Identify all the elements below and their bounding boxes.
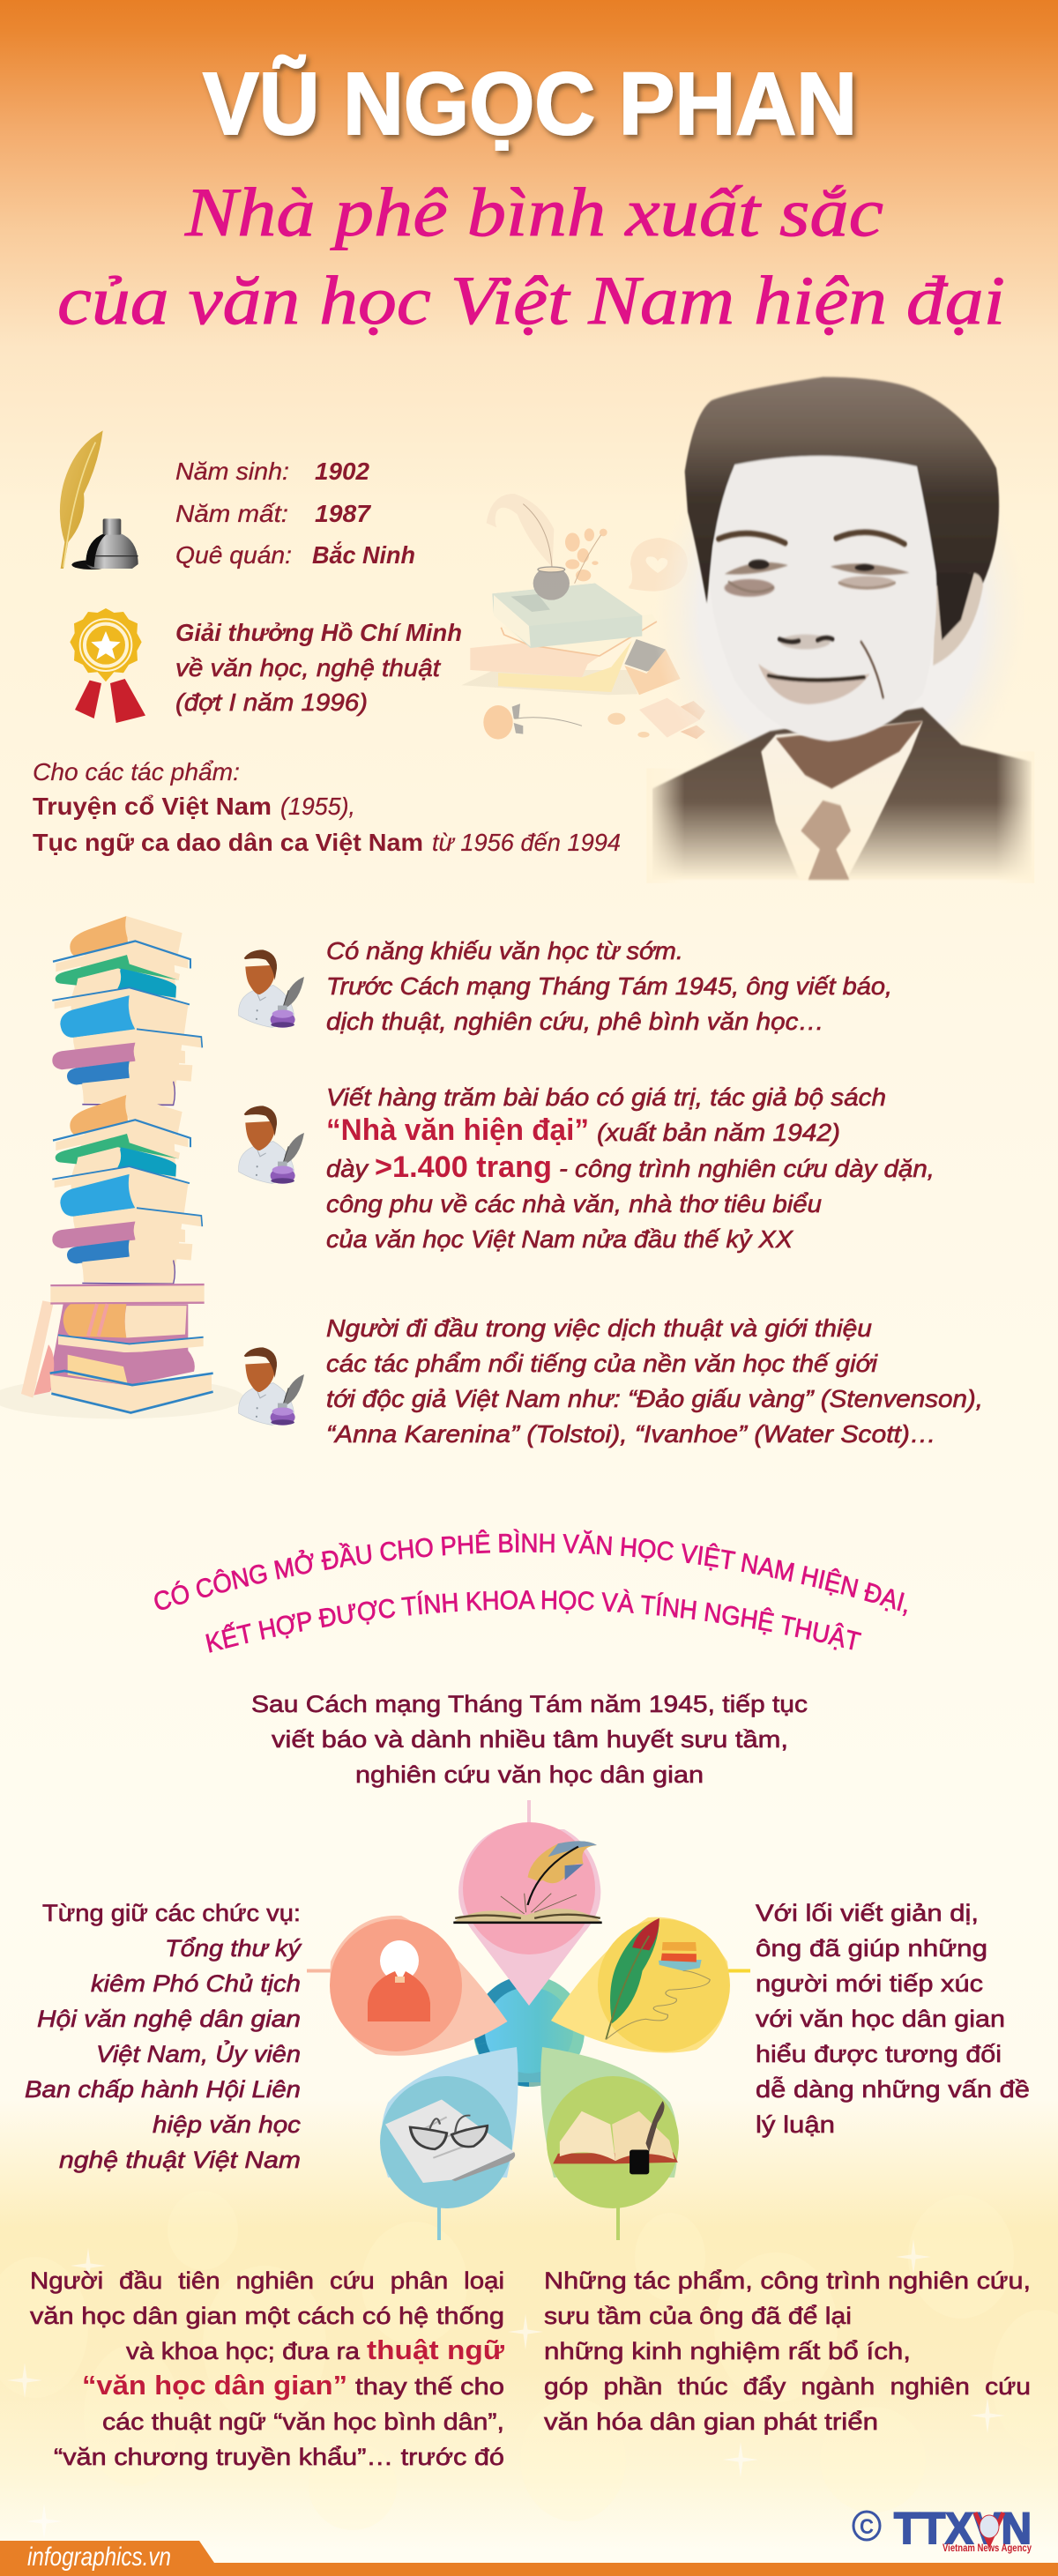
portrait [646,377,1034,883]
pink petal [453,1822,602,2006]
award text [175,619,462,716]
right text: plain writing style: người mới tiếp xúc [756,1970,983,1997]
birth, death and hometown: 1902 [315,458,369,485]
left text: positions held: nghệ thuật Việt Nam [59,2147,301,2173]
text block: Nhà văn hiện đại: >1.400 trang [375,1150,552,1184]
text block: Nhà văn hiện đại: của văn học Việt Nam nửa đầu thế kỷ XX [326,1225,794,1253]
flower diagram [307,1800,750,2240]
icon: quill and open book [453,1841,602,1923]
bottom right text: works and legacy: góp phần thúc đẩy ngành nghiên cứu [544,2373,1031,2400]
TTXVN logo: TTXVN [894,2504,1032,2553]
left text: positions held: Hội văn nghệ dân gian [37,2006,301,2032]
awarded works: từ 1956 đến 1994 [432,829,621,856]
green petal [540,2047,679,2208]
right text: plain writing style: Với lối viết giản dị, [756,1900,979,1926]
birth, death and hometown: Quê quán: [175,541,292,569]
awarded works: Tục ngữ ca dao dân ca Việt Nam [33,829,423,856]
text block: Nhà văn hiện đại: công phu về các nhà văn, nhà thơ tiêu biểu [326,1190,822,1217]
right text: plain writing style: với văn học dân gian [756,2006,1005,2032]
top text: after August Revolution: Sau Cách mạng Tháng Tám năm 1945, tiếp tục [251,1691,808,1717]
bottom left text: folk literature term: văn học dân gian một cách có hệ thống [30,2303,504,2329]
left text: positions held: Tổng thư ký [165,1935,302,1962]
awarded works: Cho các tác phẩm: [33,758,240,785]
yellow petal [551,1917,730,2053]
TTXVN logo: C [860,2515,874,2539]
icon: writer 2 [239,1106,304,1184]
left text: positions held: Việt Nam, Ủy viên [96,2038,301,2067]
centre disc [473,1976,585,2087]
birth, death and hometown [175,458,415,569]
left text: positions held: Từng giữ các chức vụ: [42,1900,301,1926]
right text: plain writing style [756,1900,1030,2138]
award text: (đợt I năm 1996) [175,689,368,716]
connector lines [307,1800,750,2240]
text block: early talent: Có năng khiếu văn học từ sớm. [326,937,683,964]
title: VŨ NGỌC PHAN [203,55,857,153]
TTXVN logo: Vietnam News Agency [943,2542,1032,2554]
bottom right text: works and legacy: sưu tầm của ông đã để lại [544,2303,852,2329]
birth, death and hometown: Năm mất: [175,500,288,527]
left text: positions held [25,1900,302,2173]
text block: translation pioneer [326,1314,983,1448]
left text: positions held: kiêm Phó Chủ tịch [91,1970,301,1997]
curved heading: KẾT HỢP ĐƯỢC TÍNH KHOA HỌC VÀ TÍNH NGHỆ THUẬT [205,1589,862,1653]
birth, death and hometown: Năm sinh: [175,458,289,485]
blue petal [380,2047,518,2208]
icon: feather and books [606,1918,710,2039]
icon: golden quill and ink bottle [60,430,138,570]
awarded works: Truyện cổ Việt Nam [33,793,272,820]
right text: plain writing style: hiểu được tương đối [756,2041,1002,2067]
right text: plain writing style: dễ dàng những vấn đề [756,2075,1030,2103]
bottom right text: works and legacy [544,2267,1031,2435]
left text: positions held: Ban chấp hành Hội Liên [25,2076,301,2103]
faded still life: books, quill, letters [461,494,705,740]
top text: after August Revolution: viết báo và dành nhiều tâm huyết sưu tầm, [272,1726,788,1753]
bottom right text: works and legacy: những kinh nghiệm rất bổ ích, [544,2338,911,2364]
bottom left text: folk literature term: các thuật ngữ “văn học bình dân”, [102,2408,504,2435]
icon: writer 3 [239,1347,304,1426]
orange petal [330,1916,508,2056]
right text: plain writing style: lý luận [756,2111,835,2138]
awarded works: (1955), [280,793,355,820]
award text: về văn học, nghệ thuật [175,654,441,681]
footer bar and tab [0,2541,1058,2576]
bottom right text: works and legacy: văn hóa dân gian phát triển [544,2408,878,2435]
text block: early talent: Trước Cách mạng Tháng Tám 1945, ông viết báo, [326,972,892,1000]
bottom left text: folk literature term: và khoa học; đưa ra [126,2338,361,2364]
icon: gold medal with ribbon [70,608,145,723]
curved heading: CÓ CÔNG MỞ ĐẦU CHO PHÊ BÌNH VĂN HỌC VIỆT NAM HIỆN ĐẠI, [154,1529,907,1617]
text block: Nhà văn hiện đại: - công trình nghiên cứu dày dặn, [559,1155,935,1182]
text block: Nhà văn hiện đại [326,1083,935,1253]
awarded works [33,758,621,856]
subtitle: của văn học Việt Nam hiện đại [57,262,1005,339]
text block: Nhà văn hiện đại: Viết hàng trăm bài báo có giá trị, tác giả bộ sách [326,1083,886,1111]
golden bokeh background [0,2191,1058,2539]
bottom left text: folk literature term [30,2267,505,2470]
text block: Nhà văn hiện đại: “Nhà văn hiện đại” [326,1113,589,1147]
text block: early talent [326,937,892,1035]
illustration: stack of books [0,916,244,1418]
icon: writer 1 [239,949,304,1028]
award text: Giải thưởng Hồ Chí Minh [175,619,462,646]
text block: Nhà văn hiện đại: (xuất bản năm 1942) [597,1119,840,1146]
subtitle [57,174,1005,339]
text block: translation pioneer: tới độc giả Việt Nam như: “Đảo giấu vàng” (Stenvenson), [326,1385,983,1412]
footer site name: infographics.vn [27,2542,171,2572]
subtitle: Nhà phê bình xuất sắc [184,174,883,250]
bottom left text: folk literature term: thuật ngữ [367,2334,505,2365]
bottom left text: folk literature term: Người đầu tiên nghiên cứu phân loại [30,2267,504,2294]
birth, death and hometown: Bắc Ninh [312,541,415,569]
top text: after August Revolution [251,1691,808,1788]
birth, death and hometown: 1987 [315,500,371,527]
left text: positions held: hiệp văn học [153,2111,302,2138]
icon: newspaper and glasses [385,2099,515,2183]
text block: early talent: dịch thuật, nghiên cứu, phê bình văn học… [326,1008,824,1035]
bottom left text: folk literature term: “văn học dân gian” [82,2370,347,2401]
text block: translation pioneer: các tác phẩm nổi tiếng của nền văn học thế giới [326,1350,878,1377]
icon: book with inkwell [553,2101,678,2174]
text block: translation pioneer: “Anna Karenina” (Tolstoi), “Ivanhoe” (Water Scott)… [326,1420,936,1448]
top text: after August Revolution: nghiên cứu văn học dân gian [355,1761,704,1788]
text block: translation pioneer: Người đi đầu trong việc dịch thuật và giới thiệu [326,1314,872,1342]
bottom left text: folk literature term: “văn chương truyền khẩu”… trước đó [54,2444,504,2470]
bottom left text: folk literature term: thay thế cho [355,2373,504,2400]
icon: person [368,1940,430,2021]
text block: Nhà văn hiện đại: dày [326,1155,369,1182]
bottom right text: works and legacy: Những tác phẩm, công trình nghiên cứu, [544,2267,1031,2294]
right text: plain writing style: ông đã giúp những [756,1935,987,1962]
